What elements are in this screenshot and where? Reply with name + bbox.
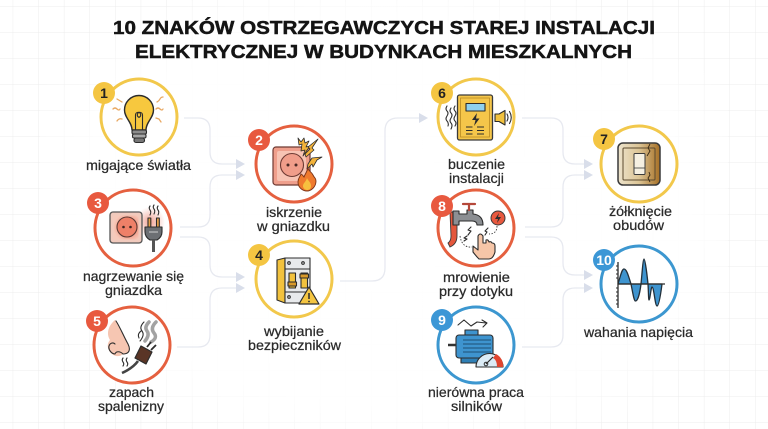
label: mrowienie przy dotyku: przy dotyku [439, 283, 513, 299]
label: nagrzewanie się gniazdka: nagrzewanie się [83, 268, 184, 284]
panel: 2 iskrzenie w gniazdku [248, 126, 332, 234]
badge: 3: 3 [94, 195, 102, 211]
badge: 1: 1 [100, 85, 108, 101]
label: żółknięcie obudów: obudów [613, 217, 665, 233]
label: nagrzewanie się gniazdka [83, 268, 184, 298]
icon: tap, hand and electric shock [448, 204, 505, 259]
badge: 8: 8 [438, 198, 446, 214]
icon: motor with gauge [448, 320, 503, 367]
badge: 10: 10 [596, 252, 612, 268]
badge: 5: 5 [93, 313, 101, 329]
icon: hot socket and plug [110, 205, 165, 252]
label: buczenie instalacji: instalacji [449, 170, 504, 186]
label: wybijanie bezpieczników: bezpieczników [248, 337, 342, 353]
arrow: 8 to 7 [525, 170, 593, 227]
panel: 9 nierówna praca silników [428, 307, 524, 414]
panel: 8 mrowienie przy dotyku [431, 190, 514, 299]
panel: 3 nagrzewanie się gniazdka [83, 190, 184, 298]
label: mrowienie przy dotyku: mrowienie [443, 269, 510, 285]
panel: 6 buczenie instalacji [431, 79, 514, 186]
label: migające światła: migające światła [86, 157, 191, 173]
panel: 7 żółknięcie obudów [593, 126, 677, 233]
label: mrowienie przy dotyku [439, 269, 513, 299]
title: ELEKTRYCZNEJ W BUDYNKACH MIESZKALNYCH [135, 41, 632, 62]
icon: circuit breaker with warning [277, 258, 319, 304]
badge: 4: 4 [255, 247, 263, 263]
badge: 7: 7 [600, 131, 608, 147]
icon: yellowed switch [618, 143, 660, 185]
arrow: 8 to 10 [525, 237, 593, 280]
arrow: 6 to 7 [522, 118, 593, 169]
title [113, 17, 655, 62]
label: zapach spalenizny: zapach [109, 384, 154, 400]
label: wahania napięcia: wahania napięcia [583, 324, 693, 340]
badge: 6: 6 [438, 85, 446, 101]
icon: humming electrical panel [446, 95, 511, 140]
icon: sparking socket [273, 138, 322, 191]
icon: voltage waveform [616, 259, 665, 308]
label: nierówna praca silników [428, 384, 524, 414]
badge: 9: 9 [438, 312, 446, 328]
arrow: 3 to 4 [180, 237, 245, 282]
label: zapach spalenizny [98, 384, 164, 414]
label: nagrzewanie się gniazdka: gniazdka [105, 282, 162, 298]
badge: 2: 2 [255, 132, 263, 148]
title: 10 ZNAKÓW OSTRZEGAWCZYCH STAREJ INSTALACJI [113, 17, 655, 38]
arrow: 1 to 2 [184, 118, 245, 169]
panel: 10 wahania napięcia [583, 246, 693, 340]
panel: 1 migające światła [86, 79, 191, 173]
label: zapach spalenizny: spalenizny [98, 398, 164, 414]
icon: light bulb [113, 96, 163, 142]
label: wybijanie bezpieczników [248, 323, 342, 353]
label: buczenie instalacji: buczenie [448, 156, 505, 172]
arrow: 3 to 2 [180, 170, 245, 227]
panel: 5 zapach spalenizny [86, 307, 170, 414]
label: nierówna praca silników: nierówna praca [428, 384, 524, 400]
arrow: 4 to 6 [340, 113, 428, 281]
label: iskrzenie w gniazdku: w gniazdku [256, 218, 330, 234]
panel: 4 wybijanie bezpieczników [248, 241, 342, 353]
label: nierówna praca silników: silników [451, 398, 503, 414]
label: iskrzenie w gniazdku: iskrzenie [266, 204, 322, 220]
arrow: 9 to 10 [522, 283, 593, 347]
label: iskrzenie w gniazdku [256, 204, 330, 234]
label: wybijanie bezpieczników: wybijanie [263, 323, 324, 339]
label: żółknięcie obudów [609, 203, 672, 233]
label: żółknięcie obudów: żółknięcie [609, 203, 672, 219]
icon: nose and burnt plug [108, 320, 156, 373]
label: buczenie instalacji [448, 156, 505, 186]
arrow: 5 to 4 [177, 283, 245, 347]
